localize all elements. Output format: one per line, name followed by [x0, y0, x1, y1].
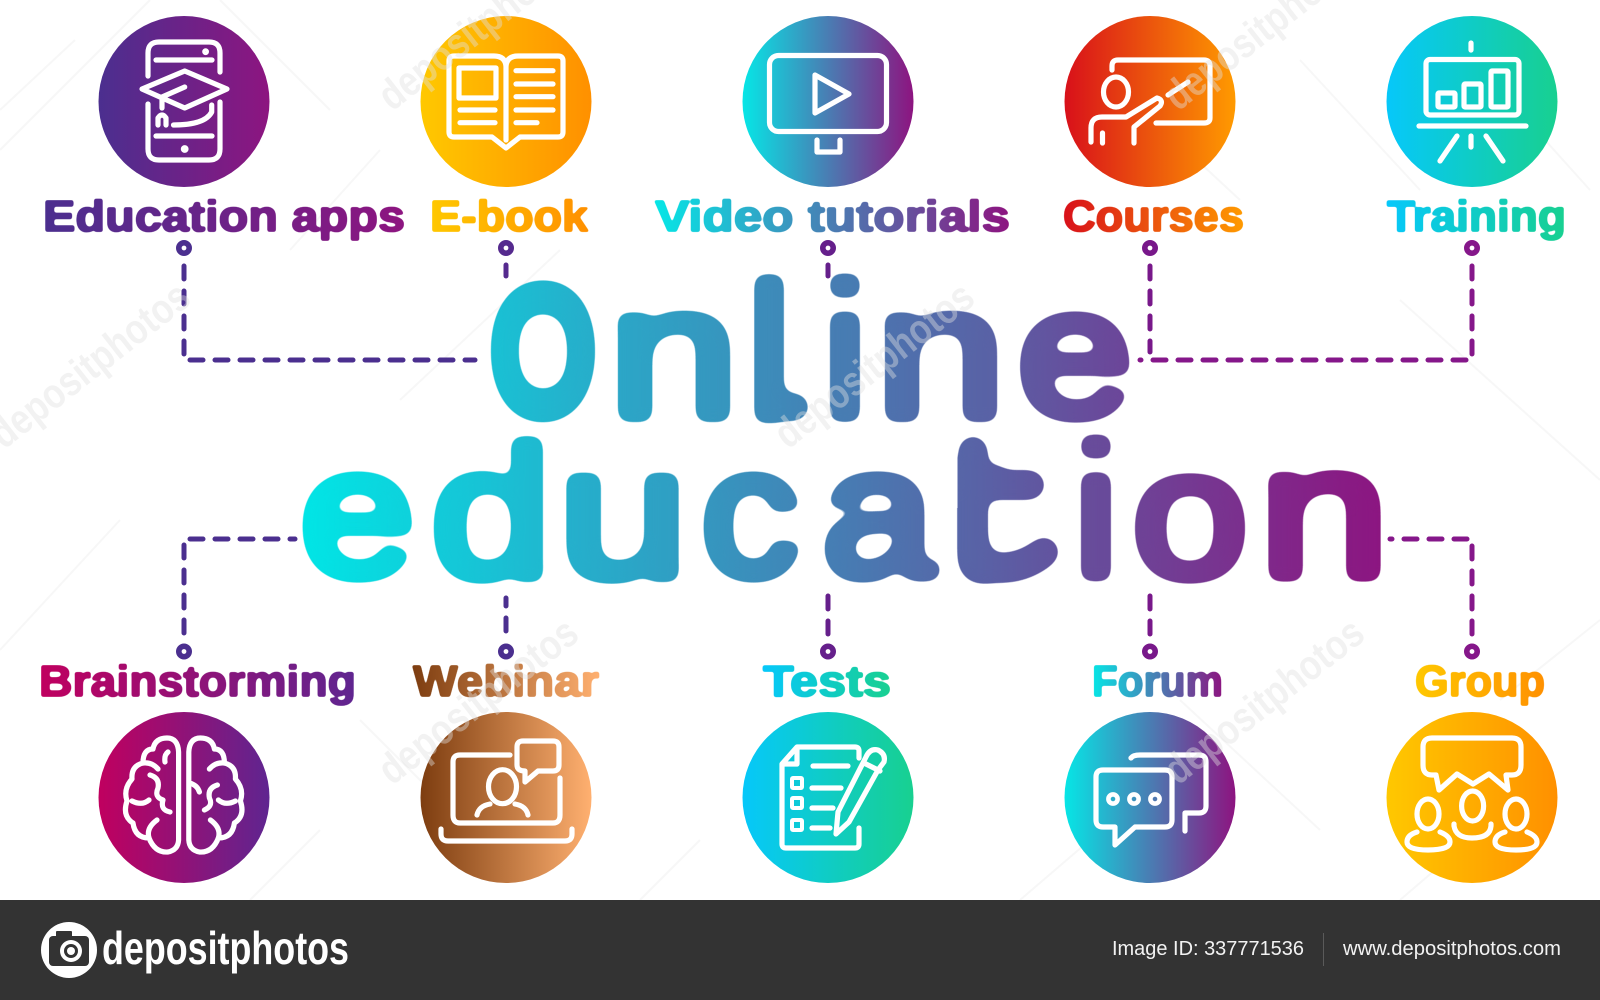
title line: Online: n: [609, 248, 738, 456]
watermarks: [0, 0, 1373, 793]
label: Group: Group: [1415, 657, 1545, 706]
watermarks: depositphotos: [369, 608, 587, 793]
item: Tests: [742, 657, 914, 883]
connector: forum: [1145, 584, 1155, 657]
icon: monitor with play button: [742, 16, 914, 187]
title line: Online: i: [819, 242, 871, 460]
title line: Online: e: [1017, 250, 1133, 455]
icon: group of people talking: [1386, 712, 1558, 883]
title line: education: c: [701, 410, 799, 615]
icon: chat bubbles: [1064, 712, 1236, 883]
title line: education: n: [1259, 407, 1389, 616]
connector: group: [1390, 539, 1477, 657]
title line: Online: O: [492, 256, 594, 448]
title: Online education: [300, 242, 1389, 619]
icon: phone with graduation cap: [98, 16, 270, 187]
label: Video tutorials: Video tutorials: [655, 192, 1010, 241]
icon: brain: [98, 712, 270, 883]
connector: brainstorming: [179, 539, 295, 657]
item: Training: [1386, 16, 1566, 241]
item: Forum: [1064, 657, 1236, 883]
connector: e-book: [501, 243, 511, 276]
title line: education: u: [558, 408, 688, 616]
item: Video tutorials: [655, 16, 1010, 241]
item: Group: [1386, 657, 1558, 883]
item: Brainstorming: [39, 657, 356, 883]
watermarks: depositphotos: [765, 272, 983, 457]
connector: webinar: [501, 598, 511, 657]
label: Training: Training: [1387, 192, 1566, 241]
footer image id: Image ID: 337771536: [1112, 938, 1304, 960]
item: Education apps: [43, 16, 405, 241]
item: E-book: [420, 16, 592, 241]
connector: video tutorials: [823, 243, 833, 276]
icon: checklist with pencil: [742, 712, 914, 883]
connectors: top right: [1140, 243, 1477, 360]
connector: tests: [823, 584, 833, 657]
title line: education: e: [300, 410, 415, 615]
footer website: www.depositphotos.com: [1342, 938, 1561, 960]
label: Education apps: Education apps: [43, 192, 405, 241]
label: Webinar: Webinar: [413, 657, 599, 706]
connectors: top left: [179, 243, 475, 360]
label: Tests: Tests: [763, 657, 891, 706]
connector: courses: [1145, 243, 1155, 352]
title line: education: a: [822, 409, 935, 614]
title line: education: o: [1132, 412, 1248, 616]
footer logo icon: camera: [41, 922, 97, 978]
title line: Online: [492, 242, 1133, 460]
title line: education: i: [1070, 404, 1122, 619]
footer logo text: depositphotos: [102, 922, 349, 974]
icon: presentation board: [1386, 16, 1558, 187]
label: Brainstorming: Brainstorming: [39, 657, 356, 706]
label: Courses: Courses: [1063, 192, 1244, 241]
title line: education: d: [431, 408, 551, 616]
footer bar: [0, 900, 1600, 1000]
icon: teacher at board: [1064, 16, 1236, 187]
icon: laptop with presenter: [420, 712, 592, 883]
title line: Online: n: [876, 248, 1005, 456]
item: Courses: [1063, 16, 1244, 241]
label: E-book: E-book: [430, 192, 589, 241]
item: Webinar: [413, 657, 599, 883]
title line: education: [300, 396, 1389, 619]
title line: education: t: [948, 396, 1002, 619]
title line: Online: l: [747, 246, 791, 458]
label: Forum: Forum: [1092, 657, 1223, 706]
icon: open book: [420, 16, 592, 187]
watermarks: depositphotos: [1155, 608, 1373, 793]
